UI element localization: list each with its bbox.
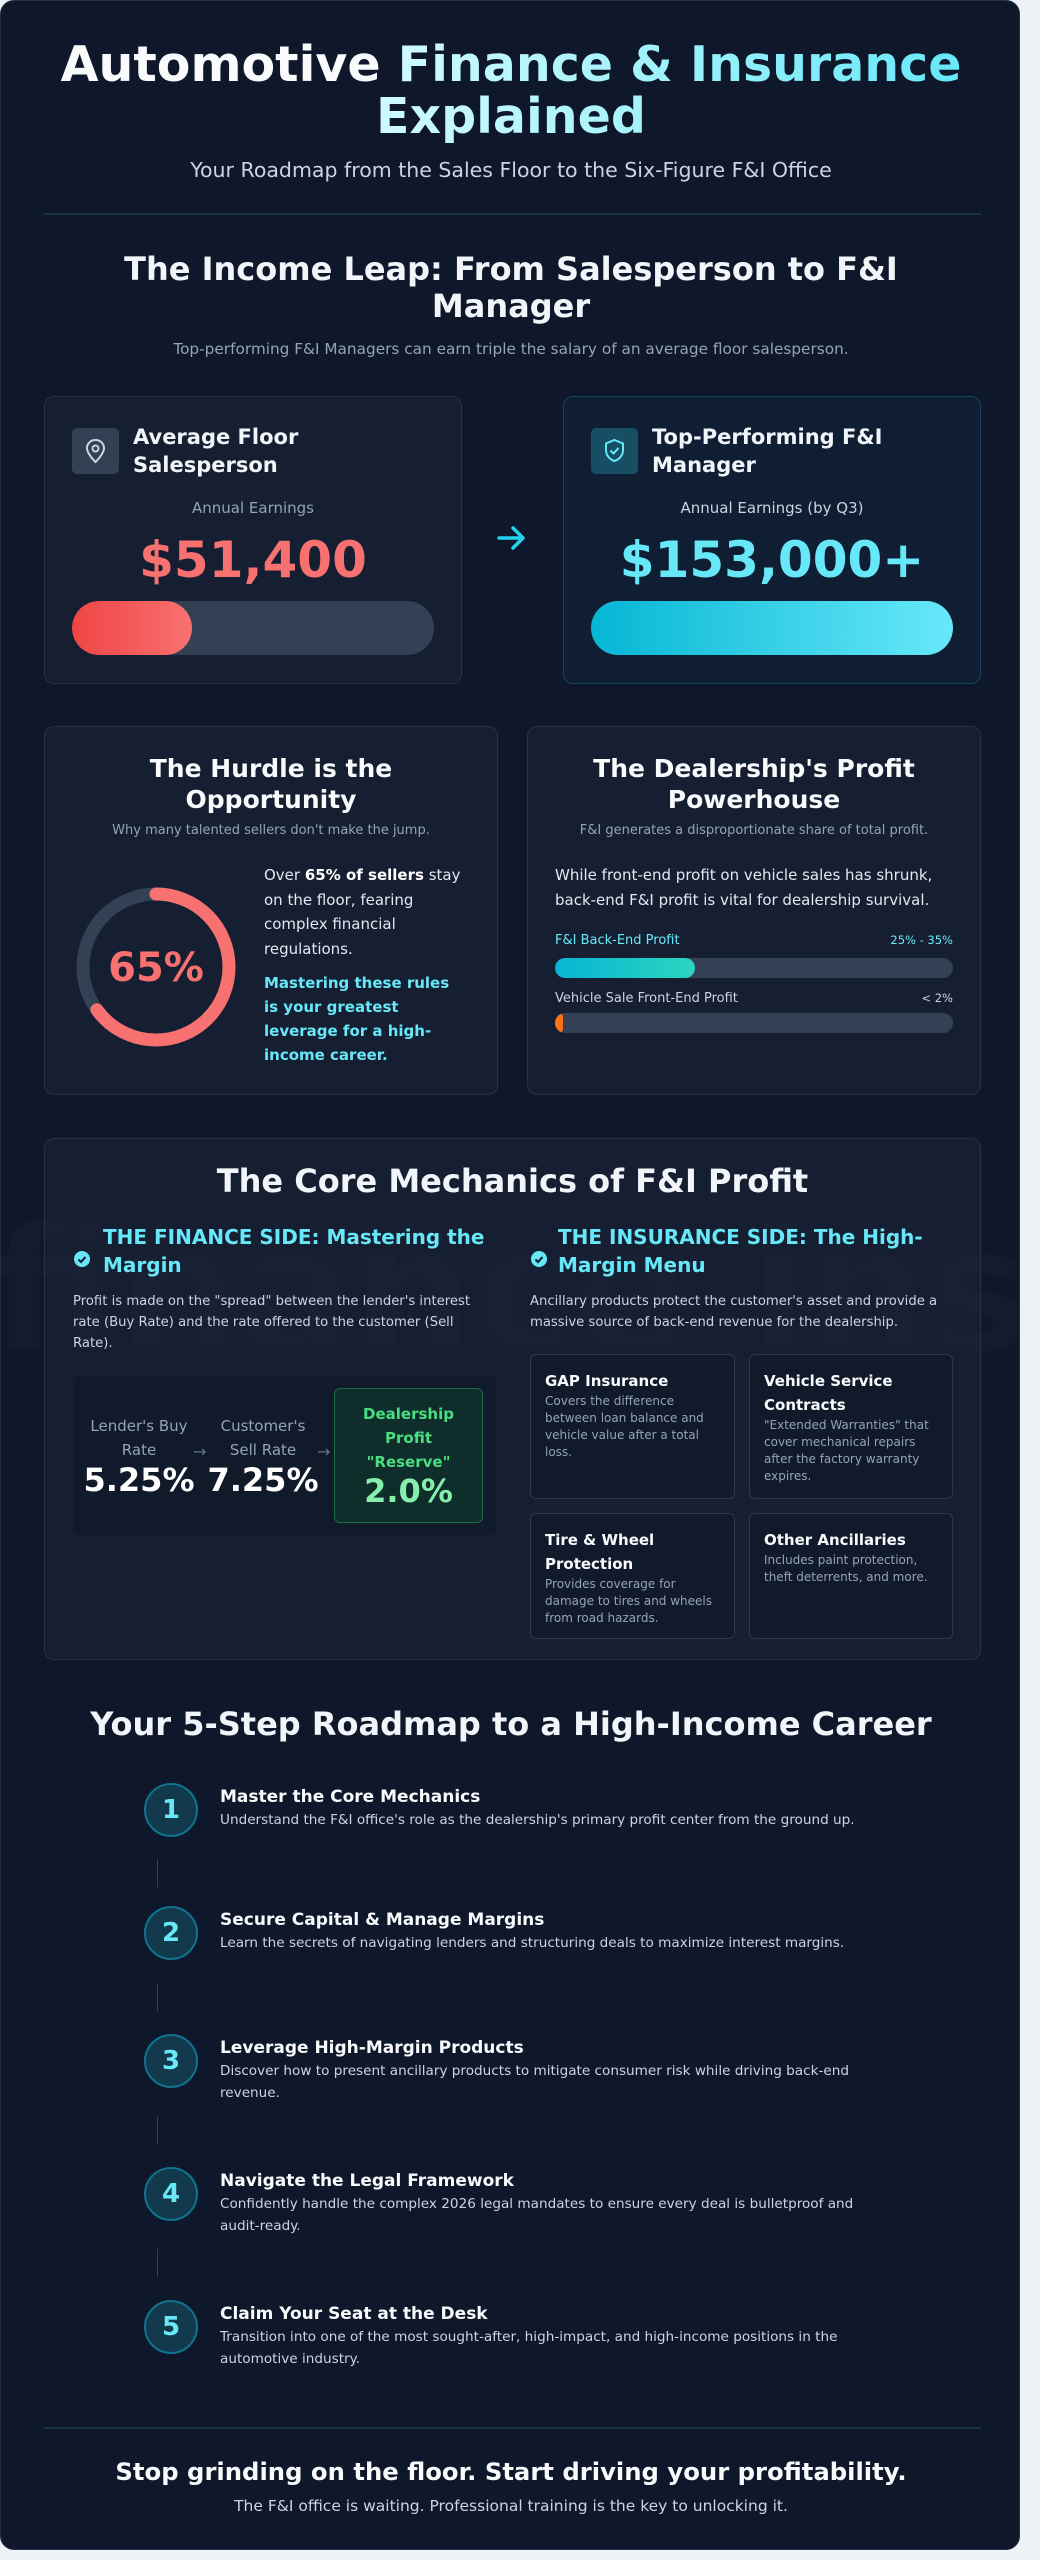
bar chart: Vehicle Sale Front-End Profit xyxy=(555,991,738,1006)
donut chart 65%: 65% xyxy=(108,945,204,991)
donut chart 65% xyxy=(76,888,236,1046)
icon: shield xyxy=(591,428,638,474)
product: GAP: GAP Insurance xyxy=(545,1372,668,1390)
step 1: Understand the F&I office's role as the dealership's primary profit center from the ground up. xyxy=(220,1812,855,1828)
text block: Over 65% of sellers stay on the floor, fearing complex financial regulations. xyxy=(264,866,460,958)
product: GAP: Covers the difference between loan balance and vehicle value after a total loss. xyxy=(545,1394,704,1459)
bar chart: < 2% xyxy=(921,991,953,1005)
buy rate: Lender's Buy xyxy=(90,1417,188,1435)
heading xyxy=(593,754,915,814)
sell rate: Customer's xyxy=(221,1417,305,1435)
step 2: 2 xyxy=(162,1918,180,1948)
dealer reserve: 2.0% xyxy=(364,1472,453,1510)
panel: average salesperson xyxy=(44,396,462,684)
dealer reserve: Dealership xyxy=(363,1405,454,1423)
heading: The Dealership's Profit xyxy=(593,754,915,783)
sell rate xyxy=(207,1417,318,1499)
roadmap steps xyxy=(144,1783,855,2367)
heading: income leap: The Income Leap: From Salesperson to F&I Manager xyxy=(124,250,898,325)
step 1: 1 xyxy=(162,1795,180,1825)
step 4: Navigate the Legal Framework xyxy=(220,2171,514,2191)
heading: The Core Mechanics of F&I Profit xyxy=(217,1162,808,1200)
heading: roadmap: Your 5-Step Roadmap to a High-Income Career xyxy=(90,1705,932,1743)
product: VSC: "Extended Warranties" that cover mechanical repairs after the factory warranty expires. xyxy=(764,1418,929,1483)
product: other: Other Ancillaries xyxy=(764,1531,906,1549)
value: $153,000+ xyxy=(620,531,924,589)
label: Annual Earnings xyxy=(192,499,314,517)
product: tire & wheel: Provides coverage for damage to tires and wheels from road hazards. xyxy=(545,1577,712,1625)
sell rate: 7.25% xyxy=(207,1461,318,1499)
heading: The Hurdle is the xyxy=(150,754,392,783)
finance side xyxy=(73,1225,484,1351)
bar chart xyxy=(555,933,953,1033)
icon: check xyxy=(74,1251,90,1267)
dealer reserve: Profit xyxy=(385,1429,432,1447)
icon: location pin xyxy=(72,428,119,474)
panel: top F&I manager xyxy=(563,396,981,684)
step 2: Secure Capital & Manage Margins xyxy=(220,1910,544,1930)
text: While front-end profit on vehicle sales has shrunk, back-end F&I profit is vital for dealership survival. xyxy=(555,866,932,908)
insurance side xyxy=(530,1225,937,1330)
step 5: 5 xyxy=(162,2312,180,2342)
subtext: F&I generates a disproportionate share of total profit. xyxy=(580,823,928,838)
heading: Powerhouse xyxy=(668,785,840,814)
card title xyxy=(652,425,882,477)
product: other: Includes paint protection, theft deterrents, and more. xyxy=(764,1553,928,1584)
card title: Salesperson xyxy=(133,453,278,477)
label: Annual Earnings (by Q3) xyxy=(680,499,864,517)
heading: Opportunity xyxy=(186,785,356,814)
step 2: Learn the secrets of navigating lenders and structuring deals to maximize interest margins. xyxy=(220,1935,844,1951)
step 1 xyxy=(144,1783,855,1837)
product: other xyxy=(749,1513,953,1639)
product: GAP xyxy=(530,1354,735,1499)
dealer reserve xyxy=(334,1388,483,1523)
step 5: Claim Your Seat at the Desk xyxy=(220,2304,488,2324)
buy rate: 5.25% xyxy=(83,1461,194,1499)
bar xyxy=(72,601,434,655)
card title xyxy=(133,425,298,477)
bar chart: 25% - 35% xyxy=(890,933,953,947)
dealer reserve: "Reserve" xyxy=(367,1453,450,1471)
spread diagram xyxy=(73,1376,496,1535)
step 3: Discover how to present ancillary products to mitigate consumer risk while driving back-end revenue. xyxy=(220,2063,849,2101)
product: VSC xyxy=(749,1354,953,1499)
step 3 xyxy=(144,2034,849,2101)
panel: profit powerhouse xyxy=(527,726,981,1095)
step 4 xyxy=(144,2167,853,2234)
section heading: THE INSURANCE SIDE: The High-Margin Menu xyxy=(558,1225,923,1277)
card title: Manager xyxy=(652,453,756,477)
heading xyxy=(150,754,392,814)
title: Explained xyxy=(376,88,646,145)
bar xyxy=(591,601,953,655)
card title: Top-Performing F&I xyxy=(652,425,882,449)
product: VSC: Vehicle Service Contracts xyxy=(764,1372,893,1414)
step 3: Leverage High-Margin Products xyxy=(220,2038,524,2058)
icon: check xyxy=(531,1251,547,1267)
step 5 xyxy=(144,2300,837,2367)
title: Automotive Finance & Insurance xyxy=(61,36,961,93)
step 5: Transition into one of the most sought-after, high-impact, and high-income positions in the automotive industry. xyxy=(220,2329,837,2367)
bar chart: F&I Back-End Profit xyxy=(555,933,680,948)
paragraph: Profit is made on the "spread" between the lender's interest rate (Buy Rate) and the rate offered to the customer (Sell Rate). xyxy=(73,1294,470,1351)
arrow: → xyxy=(193,1442,206,1461)
step 1: Master the Core Mechanics xyxy=(220,1787,480,1807)
footer CTA: Stop grinding on the floor. Start driving your profitability. xyxy=(115,2457,907,2486)
panel: hurdle xyxy=(44,726,498,1095)
title xyxy=(60,36,961,145)
subtitle: Your Roadmap from the Sales Floor to the Six-Figure F&I Office xyxy=(190,158,832,182)
panel: core mechanics xyxy=(44,1138,981,1660)
step 4: Confidently handle the complex 2026 legal mandates to ensure every deal is bulletproof and audit-ready. xyxy=(220,2196,853,2234)
callout: Mastering these rules is your greatest leverage for a high-income career. xyxy=(264,974,449,1064)
step 4: 4 xyxy=(162,2179,180,2209)
product: tire & wheel: Tire & Wheel Protection xyxy=(545,1531,654,1573)
card title: Average Floor xyxy=(133,425,298,449)
buy rate: Rate xyxy=(122,1441,156,1459)
subtext: Why many talented sellers don't make the jump. xyxy=(112,823,430,838)
paragraph: Ancillary products protect the customer's asset and provide a massive source of back-end revenue for the dealership. xyxy=(530,1294,937,1330)
footer subtext: The F&I office is waiting. Professional training is the key to unlocking it. xyxy=(234,2497,788,2515)
arrow: → xyxy=(317,1442,330,1461)
income leap subtext: Top-performing F&I Managers can earn triple the salary of an average floor salesperson. xyxy=(173,340,849,358)
sell rate: Sell Rate xyxy=(230,1441,296,1459)
product: tire & wheel xyxy=(530,1513,735,1639)
value: $51,400 xyxy=(139,531,367,589)
step 3: 3 xyxy=(162,2046,180,2076)
arrow xyxy=(497,526,525,550)
buy rate xyxy=(83,1417,194,1499)
section heading: THE FINANCE SIDE: Mastering the Margin xyxy=(103,1225,484,1277)
step 2 xyxy=(144,1906,844,1960)
